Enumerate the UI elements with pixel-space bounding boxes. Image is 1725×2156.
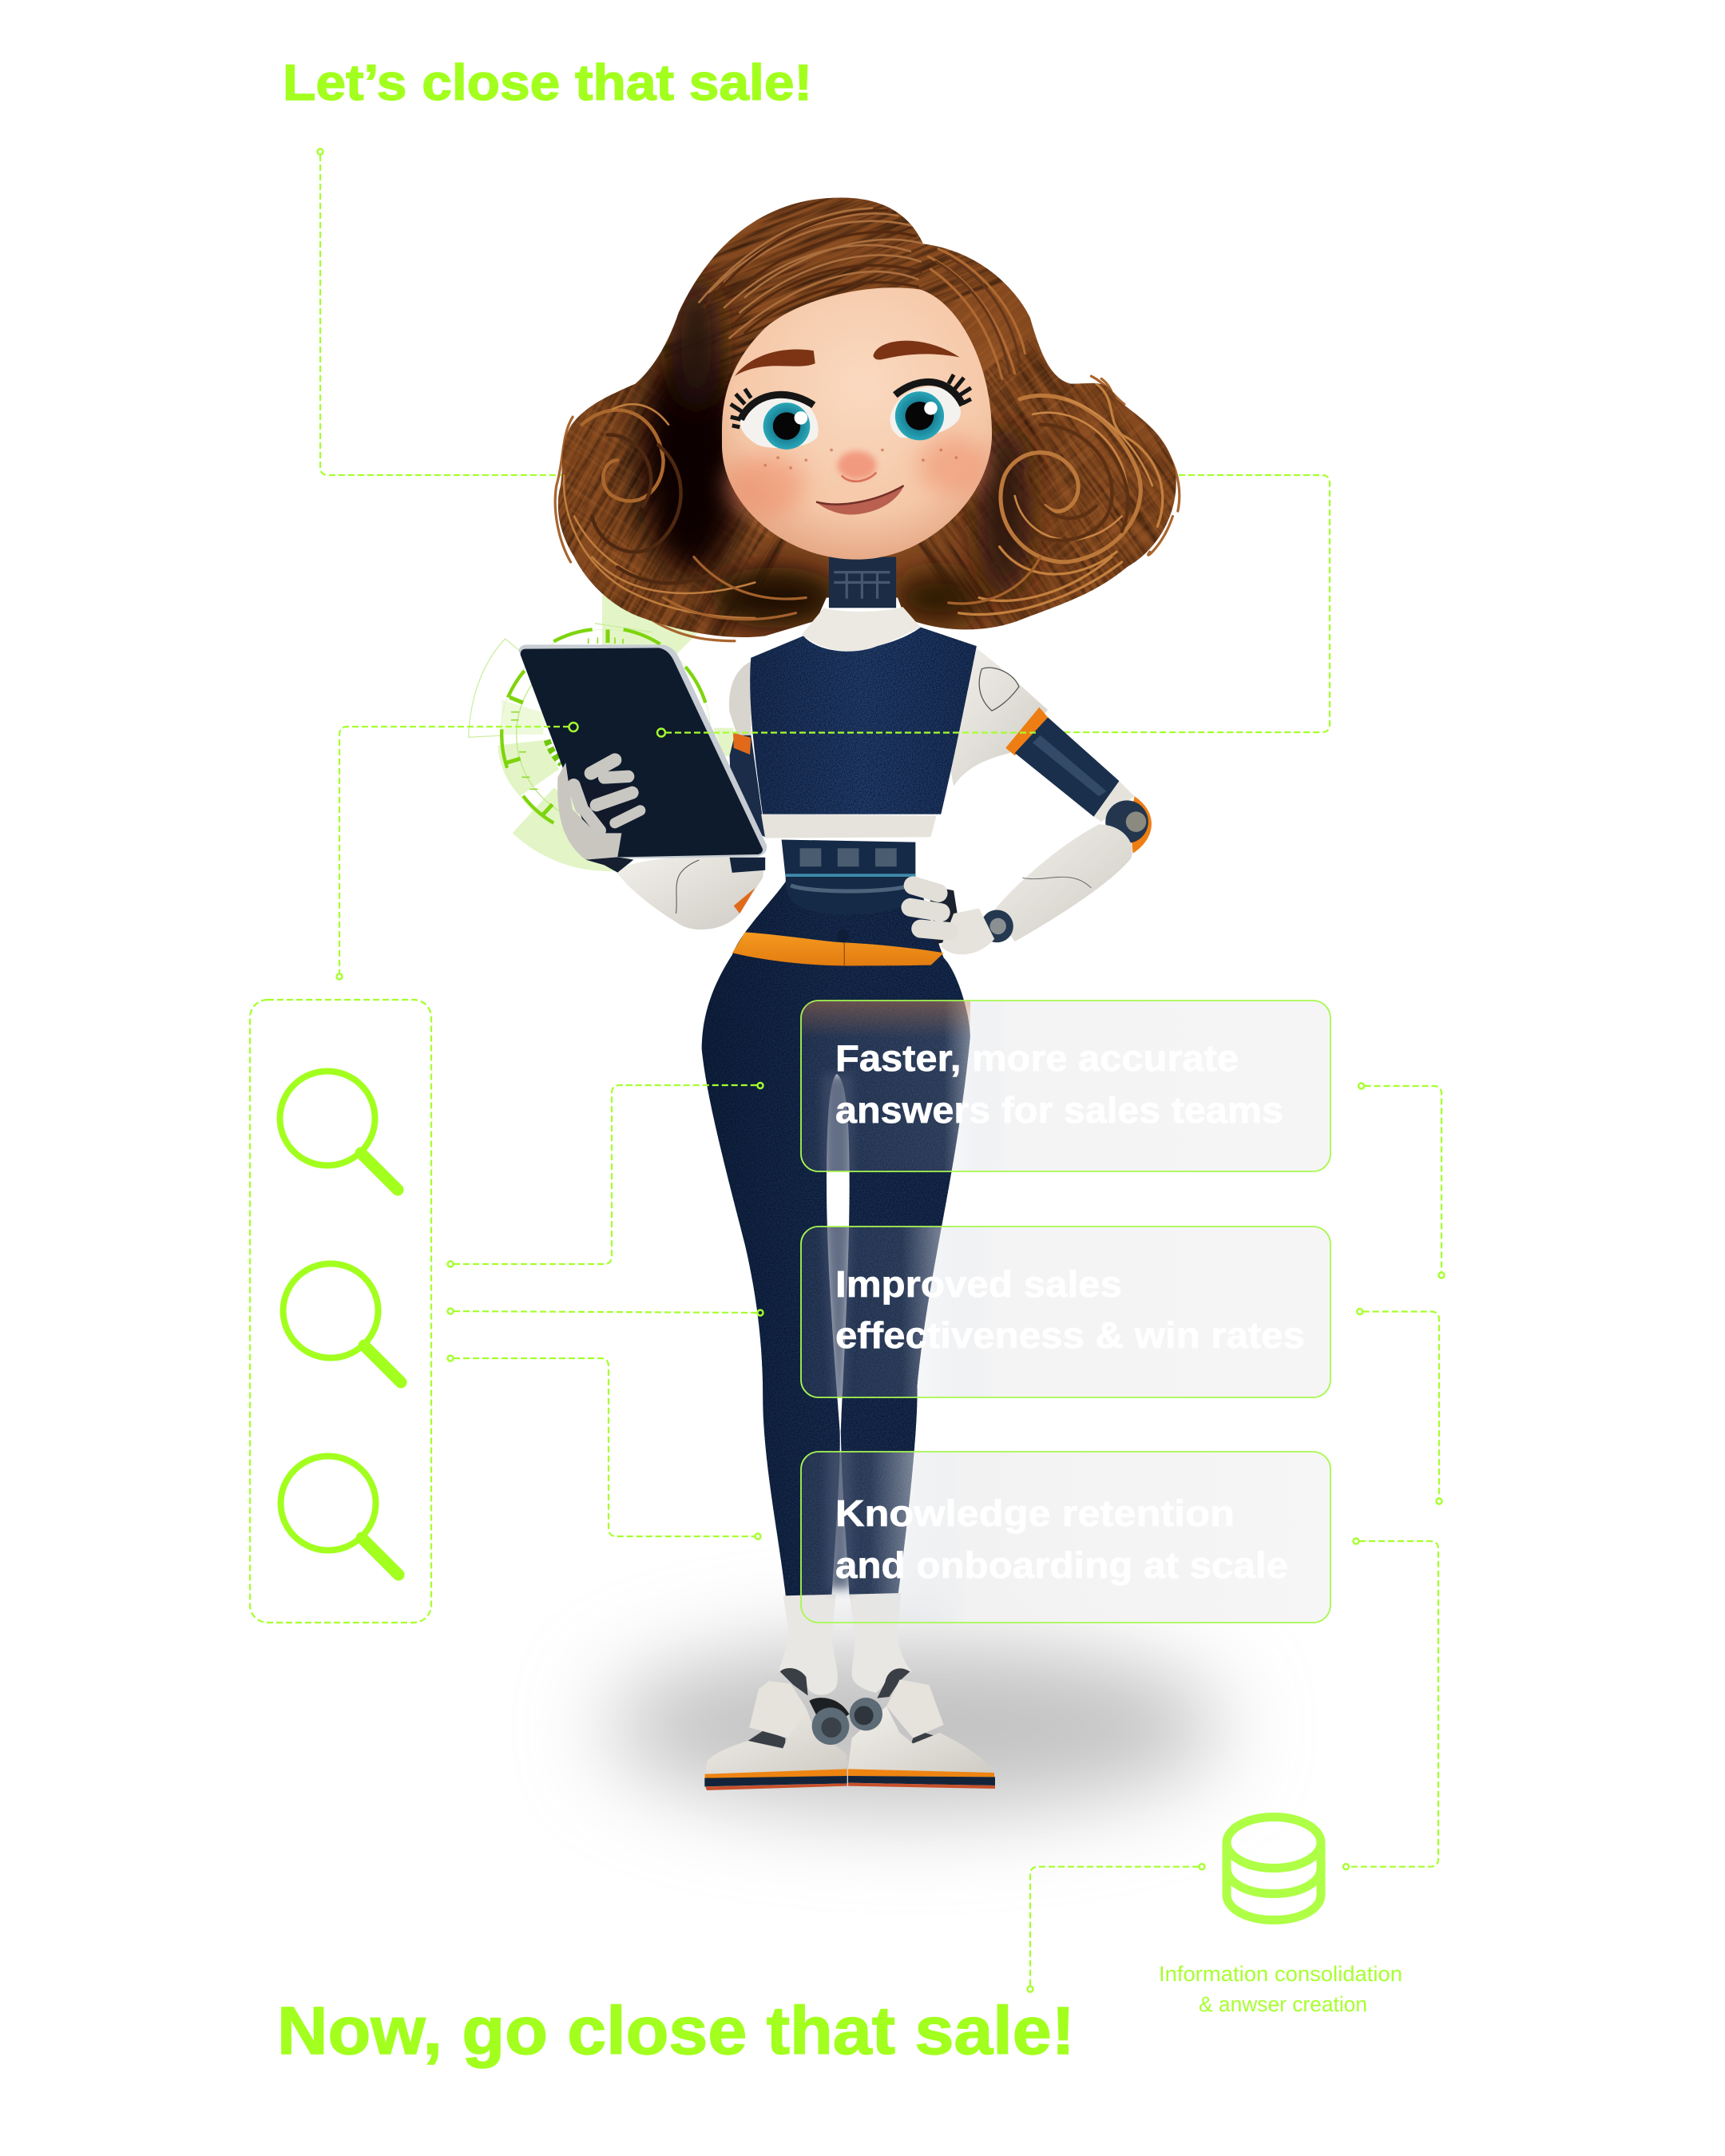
left eye — [731, 389, 819, 450]
freckles — [763, 449, 958, 470]
face — [722, 287, 992, 560]
connector: panel to card 2 — [447, 1308, 763, 1316]
hair strands — [564, 208, 1163, 620]
figure: robot woman with tablet — [463, 61, 1324, 1790]
waist — [782, 839, 915, 914]
caption: information consolidation: & anwser creation — [1199, 1992, 1367, 2016]
panel: search icons — [250, 1000, 431, 1623]
card 1 — [801, 1001, 1330, 1171]
connector: title to head — [318, 149, 575, 475]
collar — [802, 607, 921, 652]
forearm — [993, 824, 1132, 941]
connector: card 2 to right — [1357, 1309, 1442, 1504]
card 3: and onboarding at scale — [835, 1544, 1288, 1586]
belt — [732, 932, 944, 965]
hair strand texture — [662, 198, 1003, 389]
right upper arm — [949, 648, 1048, 786]
closing headline: Now, go close that sale! — [277, 1993, 1075, 2068]
card 2: Improved sales — [835, 1263, 1122, 1305]
card 1: Faster, more accurate — [835, 1037, 1239, 1079]
tablet and hand — [518, 644, 767, 873]
connector: database to closing headline — [1027, 1864, 1204, 1992]
card 3: Knowledge retention — [835, 1492, 1235, 1534]
neck — [829, 557, 896, 608]
right eye — [890, 375, 971, 440]
legs — [702, 882, 970, 1596]
wrist — [981, 910, 1013, 942]
connector: panel to card 1 — [447, 1083, 763, 1266]
hair dark zones — [638, 343, 745, 577]
caption: information consolidation — [1159, 1962, 1402, 2016]
hair — [557, 198, 1176, 637]
connector: panel to card 3 — [447, 1356, 760, 1540]
card 3 — [801, 1452, 1330, 1623]
card 2: effectiveness & win rates — [835, 1314, 1305, 1356]
hip hand — [928, 886, 962, 944]
mouth — [816, 485, 904, 515]
icon: magnifier 3 — [281, 1456, 399, 1575]
card 2 — [801, 1227, 1330, 1397]
gripping hand — [557, 763, 621, 860]
cheeks — [725, 455, 805, 516]
feet and shoes — [704, 1593, 995, 1790]
connector: card 3 to database — [1343, 1538, 1438, 1869]
connector: card 1 to right — [1358, 1083, 1444, 1278]
caption: information consolidation: Information consolidation — [1159, 1962, 1402, 1986]
hair wisps — [555, 376, 1180, 641]
eyebrows — [735, 350, 815, 376]
connector: tablet centre across torso — [657, 728, 1038, 736]
shirt band — [761, 814, 936, 838]
icon: database — [1227, 1817, 1321, 1920]
torso, head and arms — [554, 198, 1180, 955]
lower back arm — [615, 857, 765, 929]
floor shadow — [607, 1643, 1222, 1810]
connector: head to right frame — [1038, 475, 1330, 732]
icon: magnifier 2 — [283, 1263, 401, 1382]
back shoulder — [729, 661, 751, 735]
icon: magnifier 1 — [280, 1072, 398, 1190]
shirt — [750, 628, 977, 814]
nose — [838, 451, 876, 480]
connector: tablet to search panel — [337, 723, 578, 979]
elbow joint — [1129, 796, 1152, 854]
tablet — [518, 644, 767, 858]
card 1: answers for sales teams — [835, 1089, 1283, 1131]
title: Let’s close that sale! — [283, 55, 812, 111]
HUD dial behind tablet — [469, 595, 733, 871]
leg gap seen through glass cards — [823, 1074, 853, 1589]
